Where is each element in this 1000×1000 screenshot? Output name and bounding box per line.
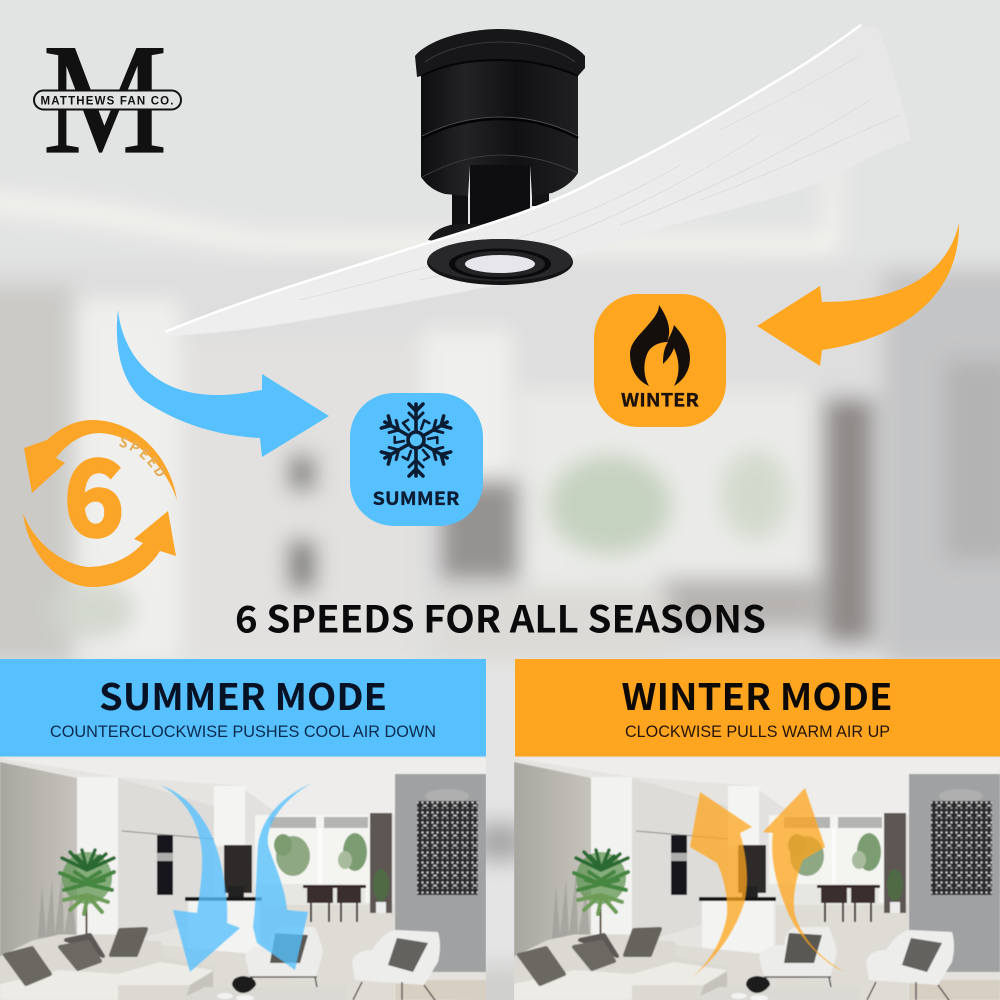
- summer header band: [0, 659, 486, 756]
- panel: winter mode: [514, 659, 1000, 1000]
- winter badge: [594, 294, 726, 427]
- winter header band: [515, 659, 1000, 756]
- ceiling fan: [165, 25, 911, 336]
- headline: 6 SPEEDS FOR ALL SEASONS: [235, 590, 766, 644]
- logo name pill: [34, 90, 181, 110]
- summer badge: [350, 393, 483, 526]
- winter mode heading: WINTER MODE: [622, 668, 892, 721]
- summer arrow: [117, 310, 329, 457]
- numeral 6: 6: [64, 414, 124, 566]
- logo monogram M: M: [43, 12, 167, 187]
- airflow arrows up: [688, 788, 845, 980]
- winter mode description: CLOCKWISE PULLS WARM AIR UP: [625, 722, 890, 741]
- lower rotation arrow: [23, 511, 176, 587]
- fan motor housing: [415, 29, 585, 246]
- summer label: SUMMER: [372, 485, 460, 511]
- summer mode heading: SUMMER MODE: [99, 668, 387, 721]
- winter arrow: [757, 223, 959, 366]
- upper rotation arrow: [24, 420, 177, 500]
- speed arc text: SPEED: [119, 437, 165, 476]
- airflow arrows down: [160, 783, 312, 972]
- logo name pill: MATTHEWS FAN CO.: [40, 96, 174, 108]
- summer mode description: COUNTERCLOCKWISE PUSHES COOL AIR DOWN: [50, 722, 436, 741]
- winter room photo: [514, 757, 1000, 1000]
- panel: summer mode: [0, 659, 486, 1000]
- summer room photo: [0, 757, 486, 1000]
- icon: flame: [630, 305, 690, 386]
- icon: snowflake: [378, 404, 454, 476]
- white fan blade: [165, 25, 911, 336]
- fan light plate: [427, 239, 573, 285]
- logo: Matthews Fan Co.: [34, 12, 181, 187]
- 6 speed badge: [23, 414, 177, 587]
- winter label: WINTER: [621, 386, 699, 412]
